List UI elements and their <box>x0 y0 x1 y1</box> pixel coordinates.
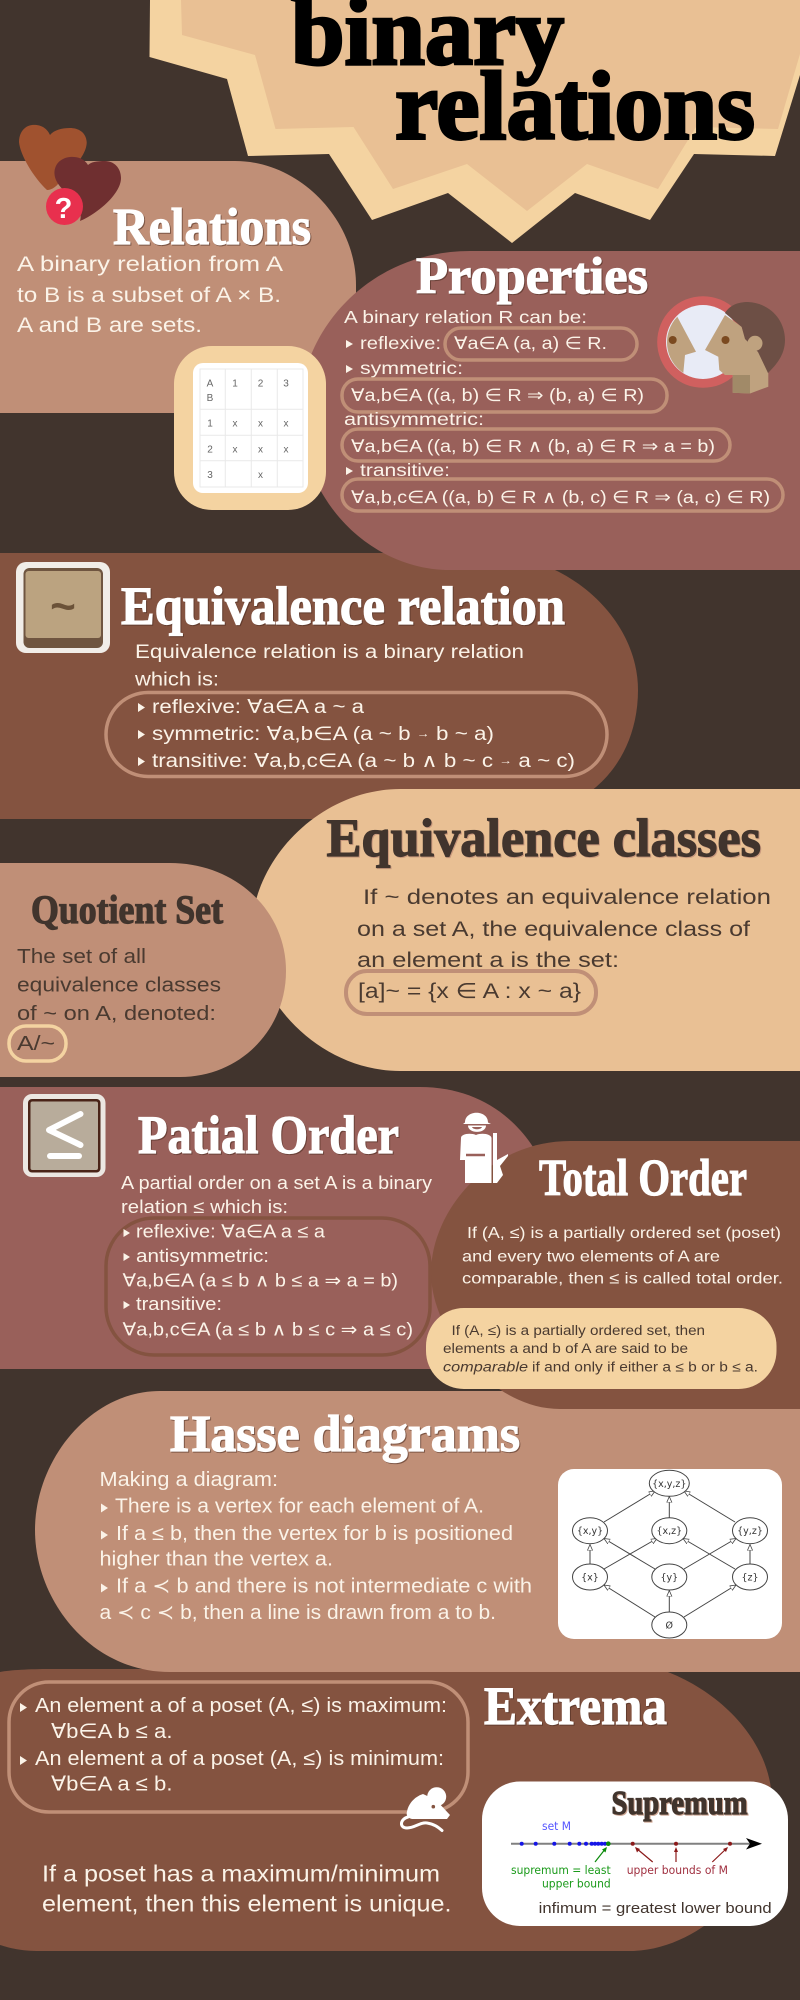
text: partial order definition <box>121 1173 432 1217</box>
text: diagram rules: Making a diagram: <box>100 1469 278 1491</box>
panel: extrema <box>0 1669 788 1951</box>
label: upper bounds: upper bounds of M <box>627 1863 728 1877</box>
text: relations definition: A binary relation from A <box>17 253 283 276</box>
text: quotient definition: equivalence classes <box>17 974 221 996</box>
callout: equivalence properties: symmetric: ∀a,b∈A (a ~ b <box>152 724 371 745</box>
icon: tilde key: ~ <box>50 582 76 631</box>
table: relation matrix: x <box>232 444 238 456</box>
chart: hasse diagram: {x,y} <box>577 1526 603 1537</box>
text: diagram rules: a ≺ c ≺ b, then a line is drawn from a to b. <box>100 1602 496 1624</box>
icon: less-or-equal key <box>23 1094 106 1177</box>
text: properties list: antisymmetric: <box>344 409 484 429</box>
callout: class formula: [a]~ = {x ∈ A : x ~ a} <box>358 980 581 1003</box>
callout: maximum and minimum: An element a of a poset (A, ≤) is minimum: <box>35 1747 444 1770</box>
panel: equivalence relation <box>0 553 638 819</box>
heading: properties: Properties <box>416 248 648 305</box>
text: properties list: ∀a,b∈A ((a, b) ∈ R ⇒ (b, a) ∈ R) <box>351 385 644 405</box>
text: quotient definition: of ~ on A, denoted: <box>17 1003 216 1025</box>
heading: quotient set: Quotient Set <box>31 887 224 932</box>
callout: comparable definition: if and only if either a ≤ b or b ≤ a. <box>532 1360 758 1374</box>
table: relation matrix: 2 <box>207 444 213 456</box>
table: relation matrix: 3 <box>283 378 289 390</box>
heading: total order: Total Order <box>539 1150 747 1207</box>
callout: maximum and minimum: ∀b∈A b ≤ a. <box>51 1720 172 1743</box>
table: relation matrix: x <box>284 444 288 456</box>
text: equivalence definition <box>134 642 524 690</box>
text: diagram rules <box>100 1469 532 1624</box>
text: class definition: on a set A, the equivalence class of <box>357 918 750 941</box>
text: equivalence definition: which is: <box>134 670 219 690</box>
title text: relations <box>395 52 755 160</box>
table: relation matrix: x <box>232 418 238 430</box>
callout: class formula <box>346 971 596 1014</box>
callout: maximum and minimum: An element a of a poset (A, ≤) is maximum: <box>35 1694 447 1717</box>
text: diagram rules: There is a vertex for each element of A. <box>115 1496 484 1518</box>
icon: faces in mirror <box>657 296 785 394</box>
callout: comparable definition <box>426 1308 776 1389</box>
table: relation matrix: x <box>258 418 263 430</box>
label: supremum: supremum = least <box>511 1863 611 1877</box>
title banner <box>150 0 800 243</box>
callout: partial order properties: ∀a,b∈A (a ≤ b ∧ b ≤ a ⇒ a = b) <box>122 1270 398 1290</box>
callout: partial order properties: ∀a,b,c∈A (a ≤ b ∧ b ≤ c ⇒ a ≤ c) <box>122 1320 413 1340</box>
icon: mouse <box>401 1787 450 1830</box>
text: total order definition: If (A, ≤) is a partially ordered set (poset) <box>467 1225 781 1242</box>
label: supremum <box>511 1863 611 1890</box>
chart: hasse diagram: {x,z} <box>656 1526 682 1537</box>
text: class definition: an element a is the set: <box>357 949 619 972</box>
text: uniqueness note <box>42 1860 451 1916</box>
callout: partial order properties <box>106 1218 430 1355</box>
table: relation matrix: 3 <box>207 470 213 481</box>
label: supremum: upper bound <box>542 1876 611 1890</box>
text: partial order definition: relation ≤ which is: <box>121 1197 288 1217</box>
table: relation matrix: B <box>207 393 214 404</box>
title text <box>291 0 755 160</box>
callout: maximum and minimum: ∀b∈A a ≤ b. <box>51 1772 172 1796</box>
text: quotient definition: The set of all <box>17 946 146 968</box>
callout: partial order properties: antisymmetric: <box>136 1246 269 1266</box>
chart: hasse diagram: {y} <box>660 1572 678 1584</box>
table: relation matrix: A <box>207 378 214 390</box>
label: set M: set M <box>542 1819 571 1833</box>
heading: relations: Relations <box>113 199 311 256</box>
callout: partial order properties: reflexive: ∀a∈A a ≤ a <box>136 1222 326 1242</box>
heading: partial order: Patial Order <box>138 1105 399 1165</box>
text: properties list: ∀a,b∈A ((a, b) ∈ R ∧ (b, a) ∈ R ⇒ a = b) <box>351 436 715 456</box>
text: properties list: ∀a,b,c∈A ((a, b) ∈ R ∧ (b, c) ∈ R ⇒ (a, c) ∈ R) <box>351 487 770 507</box>
text: properties list: ∀a∈A (a, a) ∈ R. <box>454 333 607 353</box>
chart: supremum number line <box>482 1782 788 1926</box>
text: uniqueness note: element, then this element is unique. <box>42 1890 451 1916</box>
text: class definition <box>357 886 771 972</box>
chart: hasse diagram: {y,z} <box>737 1526 763 1537</box>
table: relation matrix: 2 <box>258 378 264 390</box>
callout: equivalence properties: → <box>499 755 512 767</box>
text: diagram rules: If a ≺ b and there is not intermediate c with <box>116 1576 532 1598</box>
heading: equivalence relation: Equivalence relation <box>121 576 565 636</box>
text: properties list: A binary relation R can be: <box>344 307 587 327</box>
callout: comparable definition: If (A, ≤) is a partially ordered set, then <box>452 1323 705 1338</box>
text: properties list <box>342 307 783 511</box>
callout: quotient notation: A/~ <box>17 1033 55 1055</box>
text: relations definition: to B is a subset of A × B. <box>17 284 281 307</box>
text: total order definition: and every two elements of A are <box>462 1248 720 1266</box>
text: total order definition: comparable, then ≤ is called total order. <box>462 1270 783 1288</box>
panel: relations <box>0 161 356 413</box>
callout: equivalence properties <box>106 692 607 776</box>
table: relation matrix <box>174 346 326 510</box>
callout: quotient notation <box>9 1026 66 1061</box>
text: diagram rules: If a ≤ b, then the vertex for b is positioned <box>116 1523 513 1545</box>
text: total order definition <box>462 1225 783 1288</box>
chart: hasse diagram <box>558 1469 782 1639</box>
heading: hasse diagrams: Hasse diagrams <box>170 1406 520 1463</box>
table: relation matrix: 1 <box>207 418 213 430</box>
callout: maximum and minimum <box>9 1682 468 1812</box>
icon: tilde key <box>16 562 110 653</box>
callout: equivalence properties: reflexive: ∀a∈A a ~ a <box>152 697 364 718</box>
table: relation matrix: x <box>284 418 288 430</box>
panel: total order <box>426 1141 800 1409</box>
text: partial order definition: A partial order on a set A is a binary <box>121 1173 432 1193</box>
text: properties list: symmetric: <box>360 358 463 378</box>
chart: hasse diagram: {x,y,z} <box>652 1479 686 1490</box>
callout: comparable definition: comparable <box>443 1360 528 1374</box>
icon: soldier <box>460 1113 508 1183</box>
callout: equivalence properties: → <box>417 728 430 740</box>
heading: extrema: Extrema <box>484 1676 667 1736</box>
text: class definition: If ~ denotes an equivalence relation <box>363 886 771 909</box>
heading: supremum: Supremum <box>612 1785 748 1822</box>
panel: partial order <box>0 1087 535 1369</box>
table: relation matrix: 1 <box>232 378 238 390</box>
text: properties list: reflexive: <box>360 333 441 353</box>
table: relation matrix: x <box>258 444 263 456</box>
callout: equivalence properties: transitive: ∀a,b,c∈A (a ~ b ∧ b ~ c <box>152 751 442 772</box>
text: diagram rules: higher than the vertex a. <box>100 1548 333 1570</box>
text: properties list: transitive: <box>360 460 450 480</box>
text: uniqueness note: If a poset has a maximum/minimum <box>42 1860 440 1886</box>
table: relation matrix: x <box>258 470 263 481</box>
panel: equivalence classes <box>252 789 800 1071</box>
callout: equivalence properties: b ~ a) <box>430 724 494 745</box>
text: relations definition: A and B are sets. <box>17 314 202 337</box>
callout: comparable definition: elements a and b of A are said to be <box>443 1341 688 1356</box>
heading: equivalence classes: Equivalence classes <box>326 808 761 868</box>
chart: hasse diagram: Ø <box>666 1620 673 1632</box>
chart: hasse diagram: {x} <box>581 1572 599 1584</box>
panel: properties <box>300 248 800 570</box>
callout: equivalence properties: a ~ c) <box>512 751 575 772</box>
icon: hearts with question mark <box>19 125 121 225</box>
icon: hearts with question mark: ? <box>55 193 72 225</box>
label: infimum: infimum = greatest lower bound <box>539 1900 772 1917</box>
panel: quotient set <box>0 863 286 1077</box>
callout: partial order properties: transitive: <box>136 1294 222 1314</box>
panel: hasse diagrams <box>35 1391 800 1672</box>
text: quotient definition <box>17 946 221 1025</box>
chart: hasse diagram: {z} <box>741 1572 759 1584</box>
text: relations definition <box>17 253 283 337</box>
text: equivalence definition: Equivalence relation is a binary relation <box>135 642 524 663</box>
